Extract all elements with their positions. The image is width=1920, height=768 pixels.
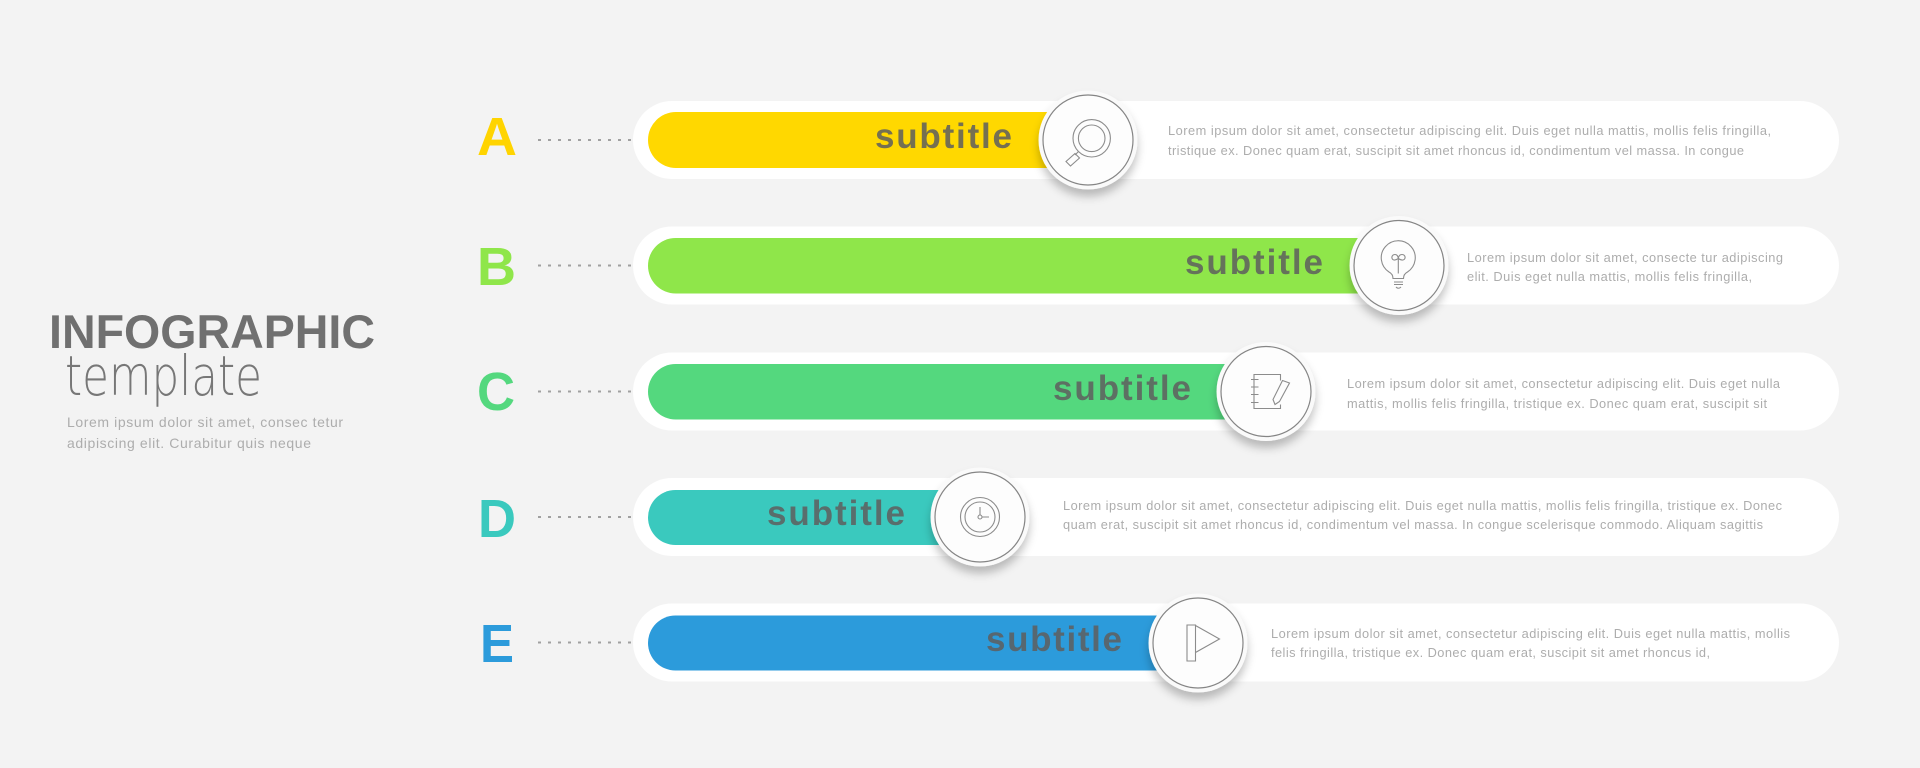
subtitle B: subtitle bbox=[1185, 243, 1323, 282]
description D: Lorem ipsum dolor sit amet, consectetur adipiscing elit. Duis eget nulla mattis, mollis felis fringilla, tristique ex. Donec bbox=[1063, 498, 1783, 513]
subtitle C: subtitle bbox=[1053, 369, 1191, 408]
letter B: B bbox=[477, 237, 516, 297]
white pill E bbox=[633, 604, 1839, 682]
icon: notebook and pencil bbox=[1216, 342, 1316, 441]
description D bbox=[1063, 498, 1783, 532]
dotted connector C bbox=[538, 390, 633, 392]
letter A: A bbox=[477, 107, 517, 167]
white pill A bbox=[633, 101, 1839, 179]
icon: flag bbox=[1148, 594, 1248, 692]
description C: Lorem ipsum dolor sit amet, consectetur adipiscing elit. Duis eget nulla bbox=[1347, 376, 1781, 391]
dotted connector B bbox=[538, 264, 633, 266]
description A: Lorem ipsum dolor sit amet, consectetur adipiscing elit. Duis eget nulla mattis, mollis felis fringilla, bbox=[1168, 123, 1771, 138]
intro text: adipiscing elit. Curabitur quis neque bbox=[67, 435, 311, 451]
teal bar D bbox=[648, 490, 980, 545]
subtitle D: subtitle bbox=[767, 494, 905, 533]
white pill D bbox=[633, 478, 1839, 556]
description C: mattis, mollis felis fringilla, tristique ex. Donec quam erat, suscipit sit bbox=[1347, 396, 1767, 411]
row E bbox=[480, 594, 1839, 692]
yellow bar A bbox=[648, 112, 1088, 168]
heading: template: template bbox=[65, 344, 262, 408]
letter D: D bbox=[478, 489, 516, 549]
icon: magnifier bbox=[1038, 90, 1138, 190]
description E: felis fringilla, tristique ex. Donec quam erat, suscipit sit amet rhoncus id, bbox=[1271, 645, 1710, 660]
letter C: C bbox=[477, 362, 515, 422]
title block bbox=[49, 305, 375, 451]
blue bar E bbox=[648, 616, 1198, 670]
description C bbox=[1347, 376, 1781, 411]
subtitle E: subtitle bbox=[986, 620, 1122, 659]
description B bbox=[1467, 250, 1783, 284]
dotted connector E bbox=[538, 642, 633, 644]
intro text: Lorem ipsum dolor sit amet, consec tetur bbox=[67, 414, 343, 430]
description A: tristique ex. Donec quam erat, suscipit sit amet rhoncus id, condimentum vel massa. In congue bbox=[1168, 143, 1744, 158]
heading: INFOGRAPHIC: INFOGRAPHIC bbox=[49, 305, 375, 358]
row C bbox=[477, 342, 1839, 441]
description E bbox=[1271, 626, 1790, 660]
row B bbox=[477, 216, 1839, 315]
green bar B bbox=[648, 238, 1399, 294]
description B: elit. Duis eget nulla mattis, mollis felis fringilla, bbox=[1467, 269, 1752, 284]
description E: Lorem ipsum dolor sit amet, consectetur adipiscing elit. Duis eget nulla mattis, mollis bbox=[1271, 626, 1790, 641]
description A bbox=[1168, 123, 1771, 158]
letter E: E bbox=[480, 614, 514, 674]
icon: light bulb bbox=[1350, 216, 1448, 315]
description B: Lorem ipsum dolor sit amet, consecte tur adipiscing bbox=[1467, 250, 1783, 265]
icon: clock bbox=[930, 468, 1030, 566]
white pill C bbox=[633, 352, 1839, 430]
green bar C bbox=[648, 364, 1266, 420]
dotted connector D bbox=[538, 516, 633, 518]
row D bbox=[478, 468, 1839, 566]
row A bbox=[477, 90, 1839, 190]
intro text bbox=[67, 414, 343, 451]
description D: quam erat, suscipit sit amet rhoncus id, condimentum vel massa. In congue scelerisque commodo. Aliquam sagittis bbox=[1063, 517, 1763, 532]
dotted connector A bbox=[538, 139, 633, 141]
subtitle A: subtitle bbox=[875, 117, 1012, 156]
white pill B bbox=[633, 226, 1839, 304]
